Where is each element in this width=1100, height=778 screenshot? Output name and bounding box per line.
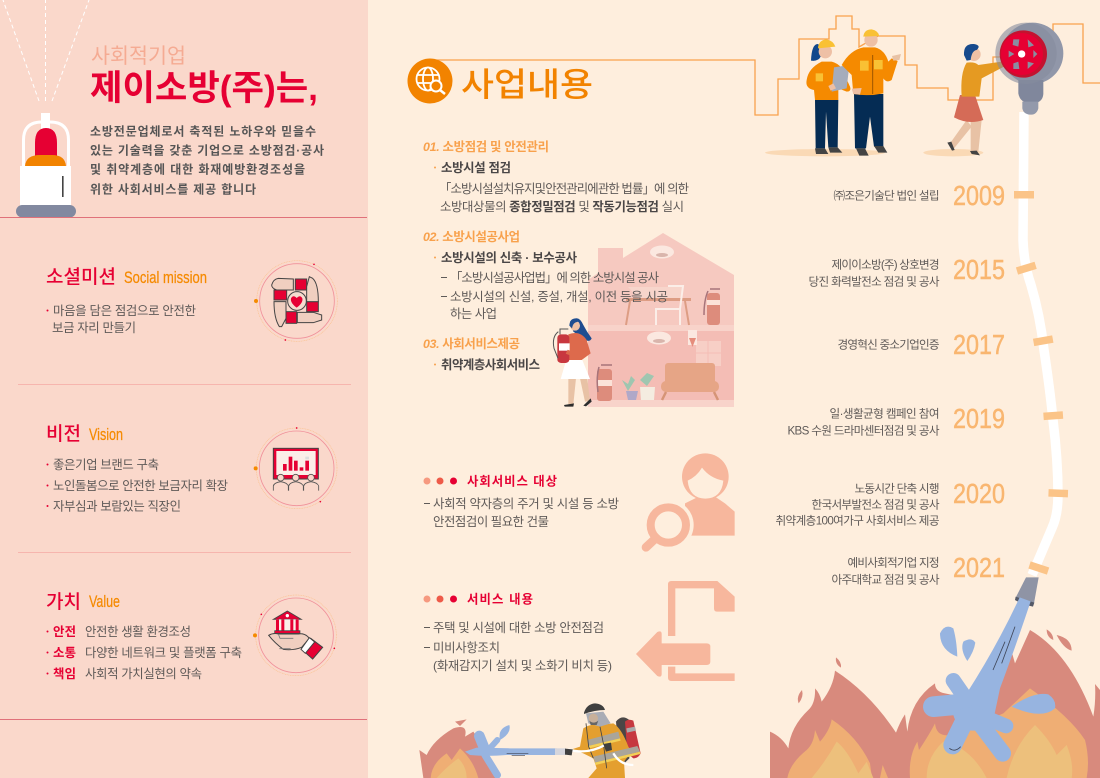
icon: presentation board bbox=[254, 427, 337, 509]
panel: vision bbox=[46, 423, 337, 514]
heading: business content bbox=[408, 58, 593, 104]
worker right bbox=[842, 29, 901, 156]
2019: 2019 bbox=[953, 403, 1005, 434]
2020: 한국서부발전소 점검 및 공사 bbox=[812, 498, 940, 512]
section 03: 취약계층사회서비스 bbox=[441, 357, 540, 372]
intro text: 소방전문업체로서 축적된 노하우와 믿을수 bbox=[90, 124, 316, 138]
smoke detectors bbox=[647, 246, 674, 344]
value list: 다양한 네트워크 및 플랫폼 구축 bbox=[85, 646, 242, 660]
text: 사회적 약자층의 주거 및 시설 등 소방 bbox=[433, 496, 619, 511]
2009 bbox=[834, 180, 1005, 211]
heading bbox=[46, 423, 123, 445]
white hose bbox=[1023, 112, 1058, 575]
section 02: 소방시설의 신축 · 보수공사 bbox=[441, 251, 578, 265]
2015: 2015 bbox=[953, 254, 1005, 285]
water stream and splash bbox=[465, 725, 557, 775]
section 01: 01. 소방점검 및 안전관리 bbox=[423, 140, 549, 154]
hydrant bbox=[995, 23, 1063, 115]
vision list: 자부심과 보람있는 직장인 bbox=[53, 500, 181, 514]
section 01: 소방대상물의 종합정밀점검 및 작동기능점검 실시 bbox=[440, 199, 684, 214]
illustration: ground shadows bbox=[765, 149, 983, 156]
mission text: 보금 자리 만들기 bbox=[52, 321, 136, 335]
2015: 당진 화력발전소 점검 및 공사 bbox=[808, 276, 940, 288]
heading: 가치 bbox=[46, 591, 81, 613]
mission text: 마음을 담은 점검으로 안전한 bbox=[53, 304, 196, 318]
2020: 노동시간 단축 시행 bbox=[854, 482, 940, 496]
timeline bbox=[776, 112, 1068, 586]
city skyline line bbox=[430, 16, 1100, 115]
illustration: large fire and water spray bbox=[770, 577, 1100, 778]
2020 bbox=[776, 478, 1005, 528]
fire extinguisher lower bbox=[597, 365, 612, 401]
icon: document with arrow bbox=[636, 581, 735, 681]
value list: 책임 bbox=[53, 667, 76, 681]
value list: 안전한 생활 환경조성 bbox=[85, 625, 191, 639]
panel: social mission bbox=[46, 261, 337, 341]
intro text: 위한 사회서비스를 제공 합니다 bbox=[90, 182, 256, 196]
section 03: 03. 사회서비스제공 bbox=[423, 336, 520, 351]
light beams bbox=[3, 0, 89, 101]
illustration: two workers bbox=[806, 29, 901, 156]
2019 bbox=[788, 403, 1005, 438]
intro text: 및 취약계층에 대한 화재예방환경조성을 bbox=[90, 162, 305, 176]
illustration: firefighter with hose bbox=[555, 703, 641, 778]
heading: Vision bbox=[89, 425, 123, 444]
section 03 bbox=[423, 336, 540, 372]
section 02: 02. 소방시설공사업 bbox=[423, 230, 520, 244]
illustration: woman with extinguisher bbox=[553, 318, 592, 407]
text: 주택 및 시설에 대한 소방 안전점검 bbox=[433, 621, 604, 635]
title: 제이소방(주)는, bbox=[90, 69, 318, 108]
body bbox=[572, 723, 632, 778]
section 01 bbox=[423, 140, 689, 214]
2020: 취약계층100여가구 사회서비스 제공 bbox=[776, 514, 940, 528]
text bbox=[424, 621, 612, 673]
woman bbox=[947, 44, 1004, 155]
year ticks bbox=[1014, 191, 1068, 575]
icon: bank on hand bbox=[253, 595, 336, 676]
window and lamp bbox=[688, 330, 721, 366]
hose and gloves bbox=[568, 745, 633, 765]
text: 안전점검이 필요한 건물 bbox=[433, 515, 549, 529]
title: 사업내용 bbox=[461, 66, 593, 103]
heading: 비전 bbox=[46, 423, 81, 445]
divider lines bbox=[0, 218, 367, 720]
2019: 일·생활균형 캠페인 참여 bbox=[830, 406, 940, 420]
2021: 아주대학교 점검 및 공사 bbox=[832, 574, 940, 586]
illustration: small fire left bbox=[419, 719, 557, 778]
2015: 제이이소방(주) 상호변경 bbox=[832, 258, 940, 272]
icon: joined hands with heart bbox=[254, 261, 337, 341]
2009: 2009 bbox=[953, 180, 1005, 211]
value list: 소통 bbox=[53, 646, 76, 660]
text bbox=[424, 496, 619, 529]
2020: 2020 bbox=[953, 478, 1005, 509]
text: (화재감지기 설치 및 소화기 비치 등) bbox=[433, 659, 612, 673]
vision list: 좋은기업 브랜드 구축 bbox=[53, 458, 159, 472]
value list: 안전 bbox=[53, 625, 76, 639]
section 02 bbox=[423, 230, 668, 321]
icon: globe with magnifier bbox=[408, 58, 452, 104]
panel: service content bbox=[424, 581, 735, 681]
vision list: 노인돌봄으로 안전한 보금자리 확장 bbox=[53, 479, 228, 493]
fire extinguisher upper bbox=[704, 289, 720, 325]
value list: 사회적 가치실현의 약속 bbox=[85, 666, 202, 681]
section 02: 하는 사업 bbox=[450, 307, 497, 321]
2009: ㈜조은기술단 법인 설립 bbox=[834, 190, 940, 202]
text: 미비사항조치 bbox=[433, 641, 500, 655]
2021 bbox=[832, 552, 1005, 586]
2017: 2017 bbox=[953, 329, 1005, 360]
panel: value bbox=[46, 591, 336, 681]
illustration: pink house bbox=[588, 233, 734, 407]
desk and chair bbox=[626, 286, 691, 325]
subtitle: 사회적기업 bbox=[91, 45, 186, 68]
section 02: 소방시설의 신설, 증설, 개설, 이전 등을 시공 bbox=[450, 290, 668, 304]
2015 bbox=[808, 254, 1005, 288]
water bbox=[933, 597, 1055, 753]
section 01: 소방시설 점검 bbox=[441, 161, 511, 175]
sofa bbox=[661, 363, 719, 400]
2017: 경영혁신 중소기업인증 bbox=[838, 338, 940, 352]
icon: person with magnifier bbox=[643, 453, 735, 550]
flames bbox=[770, 630, 1100, 778]
worker left bbox=[806, 39, 850, 154]
heading bbox=[46, 591, 120, 613]
heading bbox=[46, 266, 207, 288]
panel: left company overview bbox=[0, 0, 368, 778]
bullet dots bbox=[424, 478, 457, 484]
vision list bbox=[46, 458, 228, 514]
2021: 2021 bbox=[953, 552, 1005, 583]
heading: 서비스 내용 bbox=[467, 592, 533, 606]
intro text bbox=[90, 124, 324, 196]
bullet dots bbox=[424, 596, 457, 602]
heading: 사회서비스 대상 bbox=[467, 474, 558, 488]
head bbox=[586, 712, 611, 727]
2017 bbox=[838, 329, 1005, 360]
mission text bbox=[46, 304, 196, 335]
section 01: 「소방시설설치유지및안전관리에관한 법률」에 의한 bbox=[439, 182, 689, 196]
panel: social service target bbox=[424, 453, 735, 550]
illustration: woman at hydrant bbox=[947, 23, 1063, 155]
intro text: 있는 기술력을 갖춘 기업으로 소방점검·공사 bbox=[90, 142, 324, 158]
icon: siren bbox=[16, 113, 76, 218]
plants bbox=[622, 373, 655, 400]
heading: 소셜미션 bbox=[46, 266, 116, 288]
air tank bbox=[616, 717, 629, 763]
nozzle bbox=[1016, 577, 1039, 603]
heading: Social mission bbox=[124, 268, 207, 287]
2019: KBS 수원 드라마센터점검 및 공사 bbox=[788, 424, 940, 438]
section 02: 「소방시설공사업법」에 의한 소방시설 공사 bbox=[450, 271, 660, 285]
2021: 예비사회적기업 지정 bbox=[848, 556, 940, 570]
heading: Value bbox=[89, 592, 120, 611]
value list bbox=[46, 625, 242, 681]
